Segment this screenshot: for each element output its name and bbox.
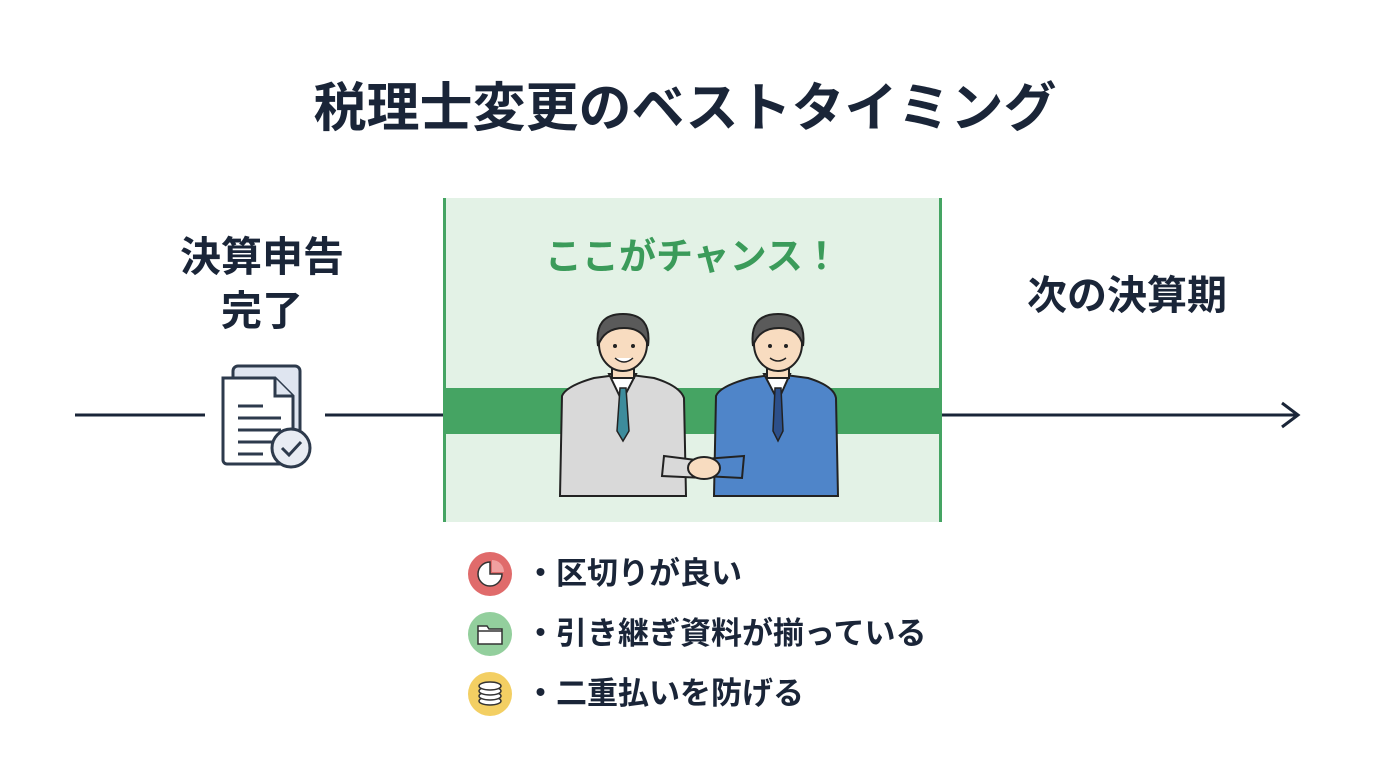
item 2: ・引き継ぎ資料が揃っている bbox=[525, 616, 926, 651]
title: 税理士変更のベストタイミング bbox=[313, 79, 1057, 138]
green band bbox=[446, 388, 939, 434]
item 1 bbox=[468, 552, 742, 596]
label: left: 完了 bbox=[221, 288, 303, 334]
label: next period: 次の決算期 bbox=[1027, 274, 1227, 318]
icon: document check bbox=[222, 364, 312, 468]
list: reasons bbox=[468, 552, 926, 716]
panel: chance bbox=[443, 198, 942, 522]
heading: chance: ここがチャンス！ bbox=[545, 236, 840, 277]
illustration: handshake bbox=[559, 313, 839, 497]
item 1: ・区切りが良い bbox=[525, 556, 742, 591]
label: left bbox=[180, 234, 344, 334]
item 2 bbox=[468, 612, 926, 656]
item 3 bbox=[468, 672, 804, 716]
label: left: 決算申告 bbox=[180, 234, 344, 280]
item 3: ・二重払いを防げる bbox=[525, 676, 804, 711]
